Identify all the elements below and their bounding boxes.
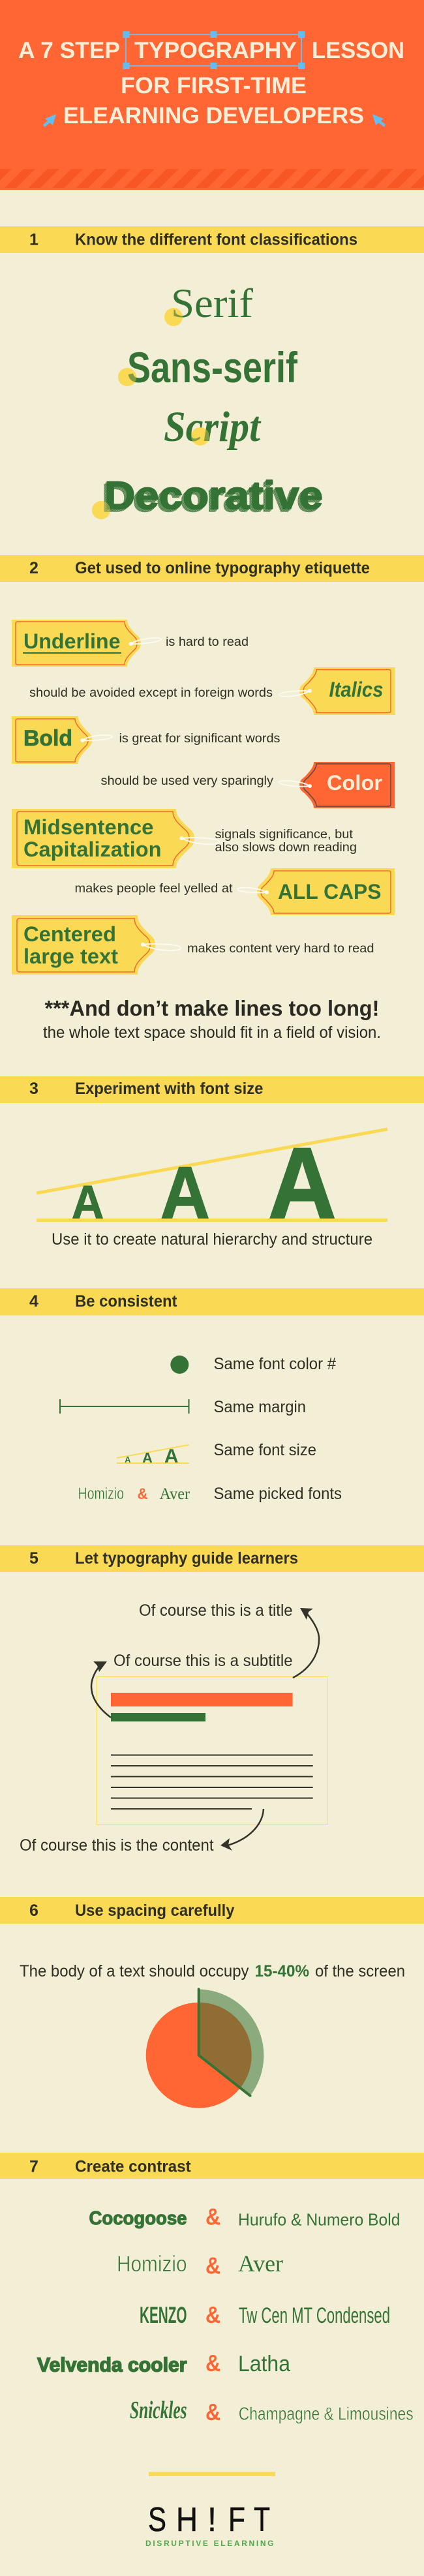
spacing statement <box>20 1962 405 1980</box>
tag: color: Color <box>327 771 382 795</box>
consistency: font size: A <box>164 1444 179 1468</box>
callout: line length: ***And don’t make lines too long! <box>44 996 380 1020</box>
font classification samples <box>92 280 323 520</box>
section 6 heading: Use spacing carefully <box>75 1902 235 1920</box>
section 5 heading: Let typography guide learners <box>75 1549 298 1568</box>
section 7 heading: 7 <box>29 2158 38 2176</box>
icon: left cursor arrow <box>44 114 56 126</box>
font size chart: A <box>160 1152 210 1235</box>
icon: text selection box <box>123 31 305 69</box>
tag: midsentence capitalization: also slows down reading <box>215 841 357 855</box>
tag: bold: is great for significant words <box>119 732 280 746</box>
font pair: homizio and aver: Aver <box>238 2250 283 2277</box>
spacing statement: The body of a text should occupy <box>20 1962 249 1980</box>
pie chart <box>146 1990 264 2108</box>
font size chart: A <box>267 1127 337 1241</box>
tag: centered large text <box>12 915 374 975</box>
tag: midsentence capitalization: signals significance, but <box>215 828 354 841</box>
section 2 heading <box>0 555 424 582</box>
logo: shift: ! <box>207 2501 217 2539</box>
callout: line length: the whole text space should fit in a field of vision. <box>43 1023 381 1042</box>
font pair: cocogoose and hurufo: Hurufo & Numero Bold <box>238 2210 401 2230</box>
sample: sans-serif: Sans-serif <box>127 343 298 391</box>
tag: midsentence capitalization <box>12 809 357 868</box>
font pair: homizio and aver <box>117 2250 283 2279</box>
font pair: velvenda and latha: Latha <box>238 2352 290 2376</box>
section 7 heading <box>0 2153 424 2179</box>
font pair: snickles and champagne: & <box>205 2399 220 2425</box>
arrow: to subtitle <box>91 1661 111 1718</box>
header banner <box>0 0 424 190</box>
content lines <box>111 1755 313 1809</box>
font pair: velvenda and latha: Velvenda cooler <box>37 2354 187 2376</box>
font pair: velvenda and latha: & <box>205 2350 220 2376</box>
logo: shift: H <box>176 2501 198 2539</box>
consistency: picked fonts: Aver <box>159 1485 190 1503</box>
section 4 heading: Be consistent <box>75 1292 177 1311</box>
tag: italics: should be avoided except in foreign words <box>29 686 273 700</box>
consistency: picked fonts: Homizio <box>78 1485 124 1503</box>
title: LESSON <box>312 38 404 63</box>
logo: shift: F <box>228 2501 245 2539</box>
label: content: Of course this is the content <box>20 1836 214 1855</box>
section 4 heading: 4 <box>29 1292 38 1311</box>
consistency: font color: Same font color # <box>214 1355 336 1373</box>
font size chart: A <box>72 1177 104 1229</box>
section 2 heading: Get used to online typography etiquette <box>75 559 370 577</box>
consistency: font size: A <box>142 1449 153 1466</box>
font pair: kenzo and tw cen: & <box>205 2301 220 2328</box>
tag: italics <box>29 667 395 715</box>
section 1 heading <box>0 226 424 253</box>
icon: right cursor arrow <box>372 114 385 126</box>
consistency: picked fonts: Same picked fonts <box>214 1485 342 1503</box>
title: ELEARNING DEVELOPERS <box>63 103 364 129</box>
consistency: picked fonts <box>78 1485 342 1503</box>
page layout diagram <box>97 1676 327 1825</box>
tag: centered large text: Centered <box>23 922 116 946</box>
arrow: to title <box>293 1608 319 1678</box>
consistency: font size: Same font size <box>214 1441 316 1459</box>
sample: script: Script <box>164 403 262 451</box>
sample: decorative: Decorative <box>104 474 323 517</box>
sample: decorative: Decorative <box>102 476 320 520</box>
label: subtitle: Of course this is a subtitle <box>114 1652 293 1670</box>
section 5 heading: 5 <box>29 1549 38 1568</box>
section 1 heading: 1 <box>29 231 38 249</box>
sample: serif: Serif <box>171 280 254 326</box>
title bar <box>111 1693 293 1706</box>
font pair: homizio and aver: & <box>205 2252 220 2279</box>
tag: italics: Italics <box>329 678 384 701</box>
subtitle bar <box>111 1713 205 1721</box>
tag: color: should be used very sparingly <box>100 774 274 788</box>
tag: centered large text: makes content very hard to read <box>187 942 374 956</box>
consistency: margin <box>60 1398 306 1416</box>
section 3 heading <box>0 1076 424 1103</box>
font size chart <box>37 1127 387 1249</box>
sample: decorative: Decorative <box>103 475 322 519</box>
font pair: snickles and champagne <box>130 2397 414 2425</box>
font pair: velvenda and latha <box>37 2350 290 2376</box>
section 7 heading: Create contrast <box>75 2158 191 2176</box>
section 2 heading: 2 <box>29 559 38 577</box>
caption: Use it to create natural hierarchy and structure <box>52 1230 372 1249</box>
section 5 heading <box>0 1545 424 1572</box>
section 3 heading: Experiment with font size <box>75 1080 264 1098</box>
font pair: kenzo and tw cen: KENZO <box>140 2303 187 2328</box>
logo: shift <box>145 2501 274 2548</box>
font pair: cocogoose and hurufo <box>89 2204 401 2230</box>
consistency: font size: A <box>125 1455 131 1465</box>
font pair: kenzo and tw cen <box>140 2301 390 2328</box>
section 4 heading <box>0 1288 424 1315</box>
font pair: cocogoose and hurufo: & <box>205 2204 220 2230</box>
tag: centered large text: large text <box>23 945 118 968</box>
title: TYPOGRAPHY <box>134 38 297 63</box>
title: FOR FIRST-TIME <box>121 73 307 98</box>
tag: all caps: makes people feel yelled at <box>74 882 233 896</box>
logo: shift: T <box>254 2501 270 2539</box>
tag: underline <box>12 620 249 667</box>
consistency: margin: Same margin <box>214 1398 306 1416</box>
tag: bold <box>12 716 280 764</box>
logo: shift: S <box>148 2501 166 2539</box>
section 3 heading: 3 <box>29 1080 38 1098</box>
arrow: to content <box>220 1809 264 1851</box>
font pair: snickles and champagne: Snickles <box>130 2397 187 2424</box>
title <box>18 38 404 129</box>
tag: color <box>100 762 395 808</box>
section 6 heading <box>0 1897 424 1924</box>
font pair: cocogoose and hurufo: Cocogoose <box>89 2208 187 2229</box>
title: A 7 STEP <box>18 38 120 63</box>
tag: all caps: ALL CAPS <box>278 880 381 903</box>
font pair: homizio and aver: Homizio <box>117 2252 187 2277</box>
tag: midsentence capitalization: Midsentence <box>23 815 154 839</box>
consistency: font color <box>170 1355 336 1374</box>
callout: line length <box>43 996 381 1042</box>
tag: underline: is hard to read <box>166 635 249 649</box>
consistency: picked fonts: & <box>137 1485 147 1503</box>
tag: all caps <box>74 868 395 915</box>
tag: underline: Underline <box>23 629 120 653</box>
spacing statement: of the screen <box>315 1962 405 1980</box>
section 1 heading: Know the different font classifications <box>75 231 357 249</box>
logo: shift: DISRUPTIVE ELEARNING <box>145 2539 274 2548</box>
section 6 heading: 6 <box>29 1902 38 1920</box>
label: title: Of course this is a title <box>139 1601 293 1620</box>
spacing statement: 15-40% <box>254 1962 309 1980</box>
tag: bold: Bold <box>23 726 72 751</box>
consistency: font size <box>117 1441 316 1468</box>
tag: midsentence capitalization: Capitalization <box>23 838 162 861</box>
